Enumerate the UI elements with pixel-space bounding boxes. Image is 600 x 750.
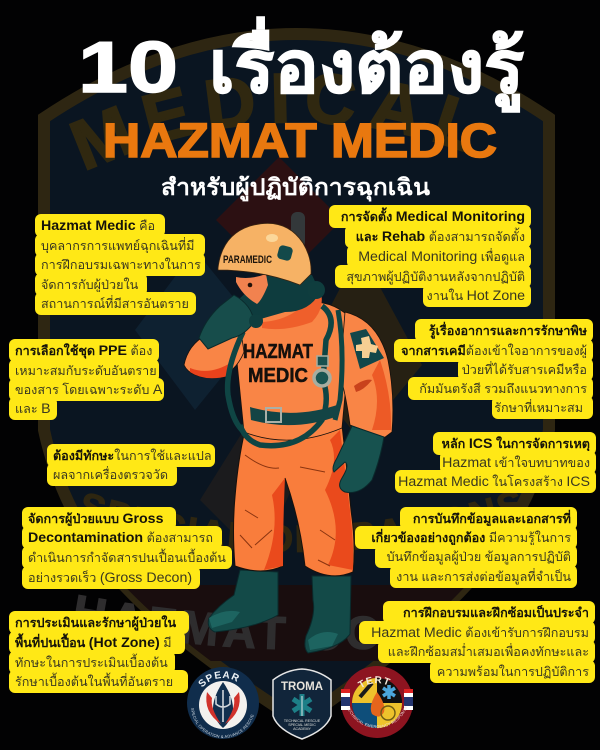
figure: hazmat medic in orange suit: MEDIC — [248, 365, 308, 387]
callout: medical monitoring and rehab: สุขภาพผู้ปฏิบัติงานหลังจากปฏิบัติ — [346, 270, 525, 284]
callout: regular training — [359, 601, 595, 683]
callout: gross decontamination: Decontamination ต้องสามารถ — [28, 530, 213, 546]
callout: PPE selection: การเลือกใช้ชุด PPE ต้อง — [15, 343, 152, 359]
background emblem: SPECIAL OPERATIONS — [84, 493, 518, 552]
callout: detector skills: ผลจากเครื่องตรวจวัด — [53, 468, 168, 482]
callout: medical monitoring and rehab: งานใน Hot Zone — [427, 288, 525, 304]
callout: ICS principles: Hazmat เข้าใจบทบาทของ — [442, 455, 590, 471]
callout: gross decontamination: ดำเนินการกำจัดสารปนเปื้อนเบื้องต้น — [28, 551, 226, 565]
callout: regular training: ความพร้อมในการปฏิบัติการ — [437, 665, 589, 679]
background emblem — [38, 28, 555, 712]
callout: Hazmat Medic definition — [35, 214, 205, 315]
background emblem: MEDICAL — [69, 73, 472, 170]
logo: TROMA: ACADEMY — [293, 727, 311, 731]
background emblem: HAZMAT CORPS — [76, 594, 376, 650]
callout: detector skills — [47, 444, 215, 486]
callout: Hazmat Medic definition: สถานการณ์ที่มีสารอันตราย — [41, 297, 189, 311]
callout: gross decontamination: อย่างรวดเร็ว (Gross Decon) — [28, 570, 192, 586]
title: 10 — [78, 28, 178, 108]
figure: hazmat medic in orange suit: HAZMAT — [243, 341, 313, 363]
title — [78, 16, 524, 113]
callout: PPE selection: เหมาะสมกับระดับอันตราย — [15, 364, 157, 378]
callout: medical monitoring and rehab: Medical Monitoring เพื่อดูแล — [358, 249, 525, 265]
figure: hazmat medic in orange suit: PARAMEDIC — [223, 254, 272, 266]
title: เรื่องต้องรู้ — [209, 16, 524, 113]
callout: chemical symptoms and treatment: กัมมันตรังสี รวมถึงแนวทางการ — [419, 382, 587, 396]
callout: Hazmat Medic definition: จัดการกับผู้ป่วยใน — [41, 278, 138, 292]
callout: PPE selection — [9, 339, 164, 420]
callout: chemical symptoms and treatment: รู้เรื่องอาการและการรักษาพิษ — [429, 324, 587, 338]
callout: ICS principles — [395, 432, 596, 493]
callout: hot zone treatment: การประเมินและรักษาผู้ป่วยใน — [15, 616, 176, 630]
callout: medical monitoring and rehab — [329, 205, 531, 307]
callout: documentation: งาน และการส่งต่อข้อมูลที่จำเป็น — [396, 570, 571, 584]
callout: Hazmat Medic definition: บุคลากรการแพทย์ฉุกเฉินที่มี — [41, 239, 194, 253]
callout: regular training: การฝึกอบรมและฝึกซ้อมเป็นประจำ — [403, 606, 589, 620]
callout: documentation: การบันทึกข้อมูลและเอกสารที่ — [413, 512, 571, 526]
callout: chemical symptoms and treatment — [394, 319, 593, 419]
callout: Hazmat Medic definition: Hazmat Medic คือ — [41, 218, 155, 234]
subtitle: สำหรับผู้ปฏิบัติการฉุกเฉิน — [161, 174, 430, 202]
callout: gross decontamination — [22, 507, 232, 589]
callout: hot zone treatment: ทักษะในการประเมินเบื้องต้น — [15, 656, 168, 670]
callout: ICS principles: Hazmat Medic ในโครงสร้าง ICS — [398, 474, 590, 490]
callout: chemical symptoms and treatment: รักษาที่เหมาะสม — [494, 401, 583, 415]
logo: TROMA: TROMA — [281, 679, 323, 693]
callout: PPE selection: ของสาร โดยเฉพาะระดับ A — [15, 382, 162, 398]
callout: medical monitoring and rehab: และ Rehab ต้องสามารถจัดตั้ง — [356, 229, 525, 245]
callout: documentation — [355, 507, 577, 588]
callout: PPE selection: และ B — [15, 401, 51, 417]
heading: HAZMAT MEDIC: HAZMAT MEDIC — [103, 115, 497, 168]
callout: hot zone treatment — [9, 611, 189, 693]
logo: TERT: TECHNICAL EMERGENCY RESPONSE TEAM — [348, 706, 408, 728]
callout: chemical symptoms and treatment: จากสารเคมีต้องเข้าใจอาการของผู้ — [401, 344, 587, 358]
callout: ICS principles: หลัก ICS ในการจัดการเหตุ — [442, 436, 590, 452]
callout: hot zone treatment: รักษาเบื้องต้นในพื้นที่อันตราย — [15, 675, 173, 689]
callout: chemical symptoms and treatment: ป่วยที่ได้รับสารเคมีหรือ — [462, 363, 587, 377]
logo: TROMA: SPECIAL MEDIC — [288, 723, 316, 727]
callout: regular training: Hazmat Medic ต้องเข้ารับการฝึกอบรม — [371, 625, 589, 641]
callout: documentation: เกี่ยวข้องอย่างถูกต้อง มีความรู้ในการ — [371, 531, 571, 545]
callout: Hazmat Medic definition: การฝึกอบรมเฉพาะทางในการ — [41, 258, 201, 272]
callout: medical monitoring and rehab: การจัดตั้ง Medical Monitoring — [341, 209, 525, 225]
logo: TERT: TERT — [357, 676, 391, 688]
callout: gross decontamination: จัดการผู้ป่วยแบบ Gross — [28, 511, 163, 527]
callout: detector skills: ต้องมีทักษะในการใช้และแปล — [53, 449, 212, 463]
logo: SPEAR: SPECIAL OPERATION & ADVANCE RESCUE — [191, 708, 254, 738]
callout: documentation: บันทึกข้อมูลผู้ป่วย ข้อมูลการปฏิบัติ — [387, 550, 571, 564]
logo: SPEAR: SPEAR — [198, 671, 239, 686]
logo: TROMA: TECHNICAL RESCUE — [284, 719, 321, 723]
callout: hot zone treatment: พื้นที่ปนเปื้อน (Hot Zone) มี — [15, 635, 172, 651]
callout: regular training: และฝึกซ้อมสม่ำเสมอเพื่อคงทักษะและ — [388, 645, 589, 659]
